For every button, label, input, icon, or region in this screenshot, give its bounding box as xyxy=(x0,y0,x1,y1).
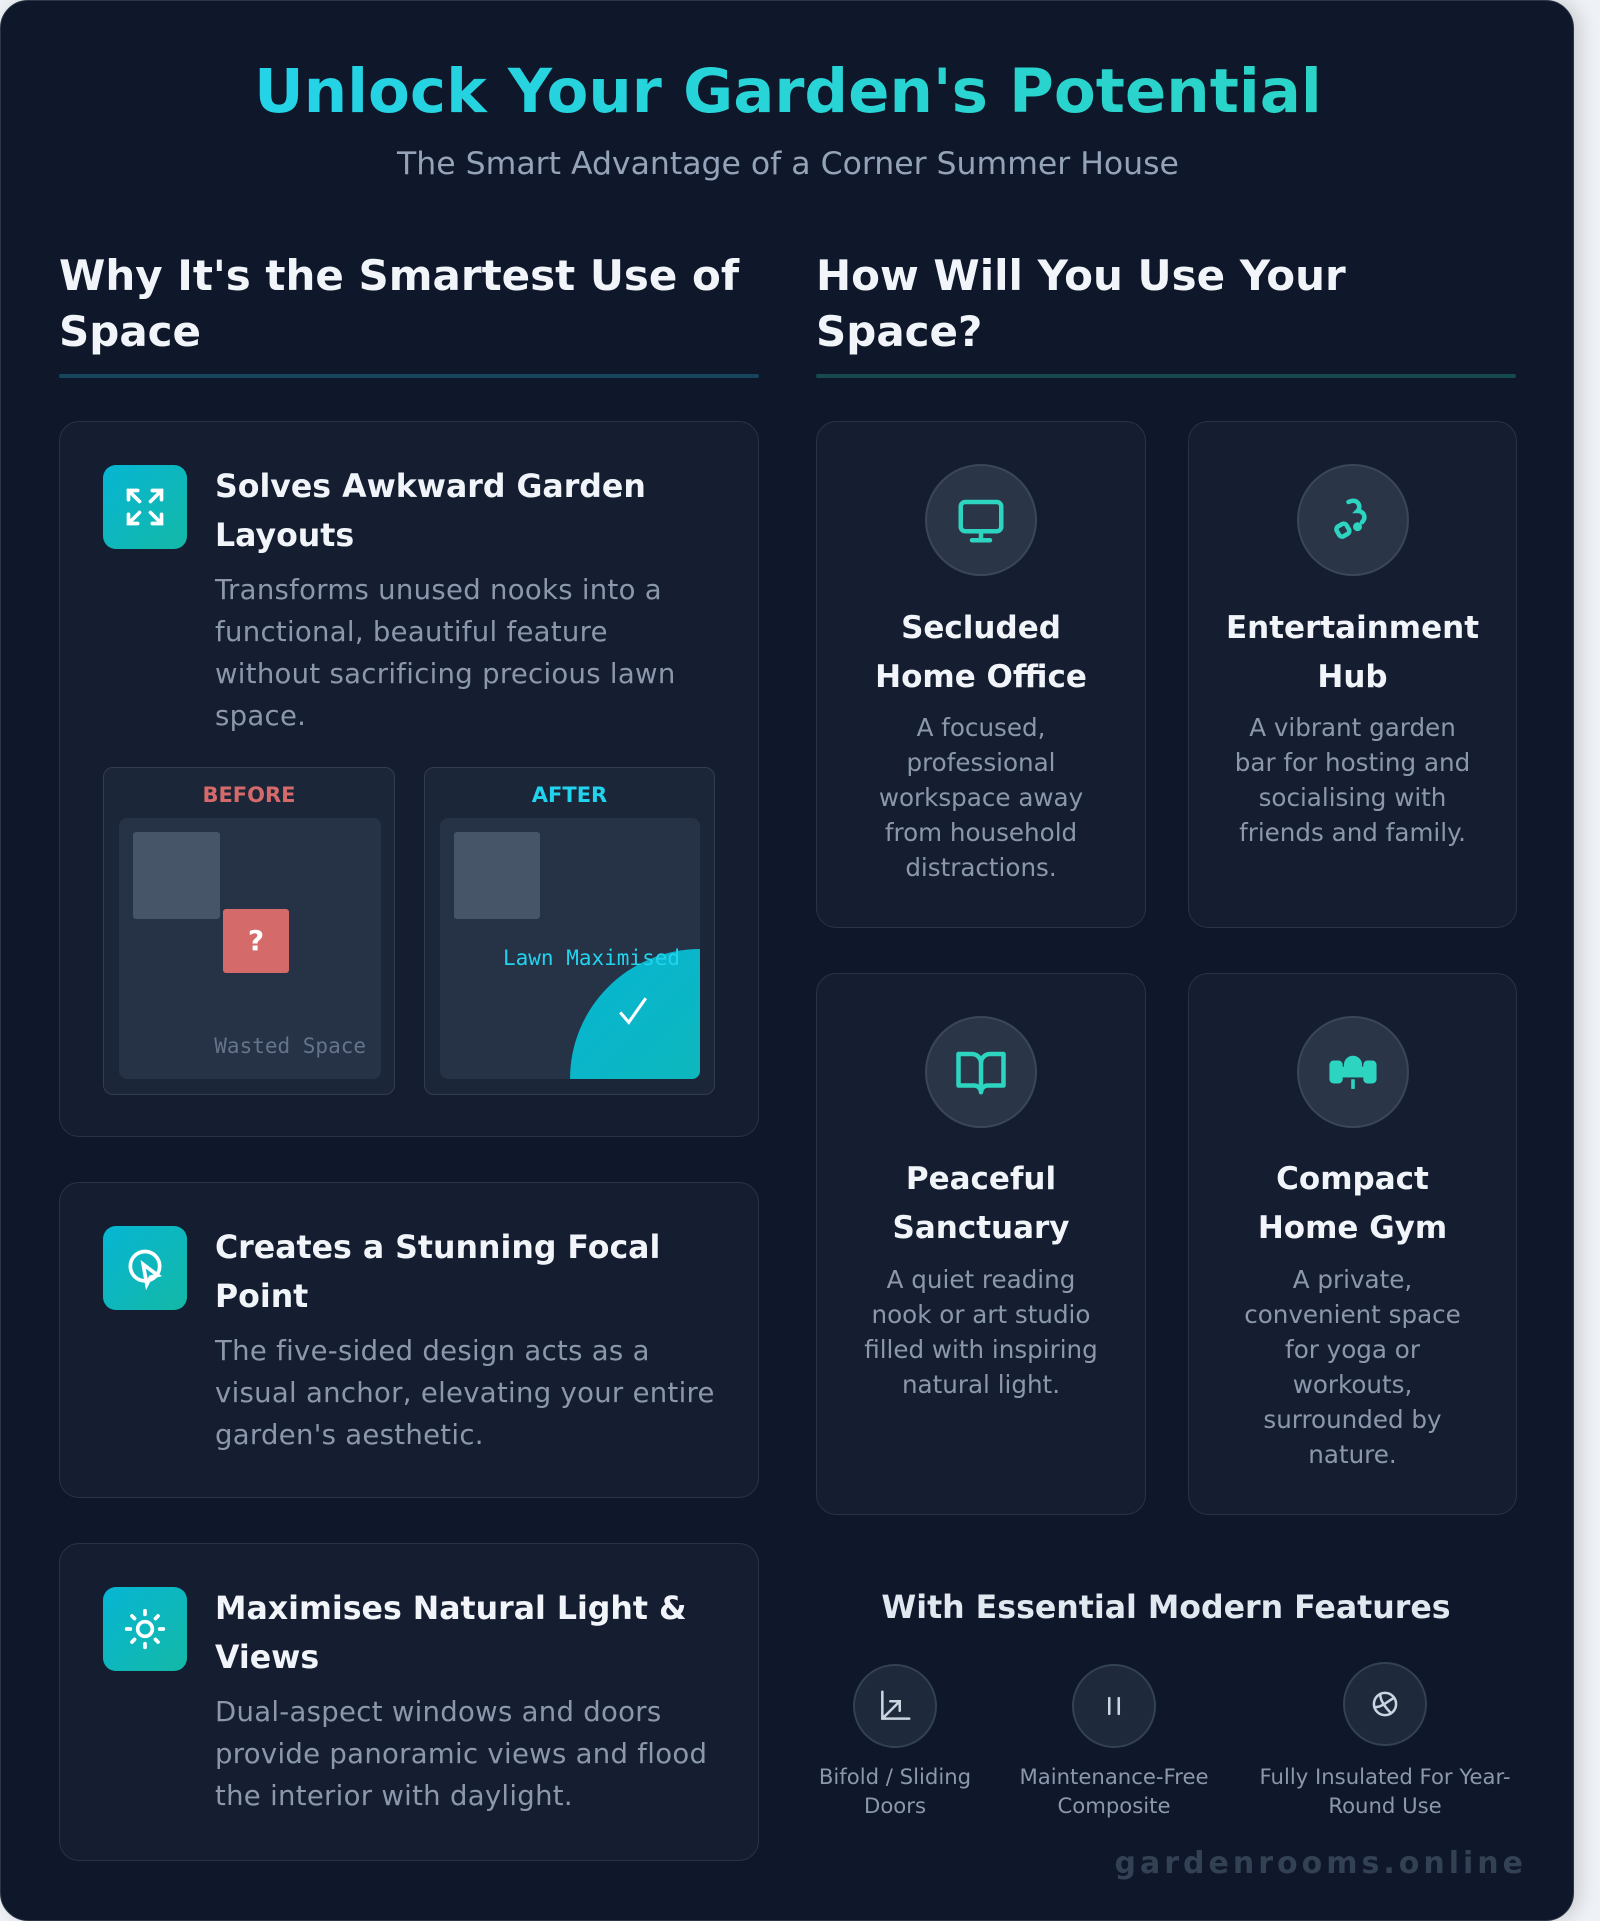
text: workouts, xyxy=(1293,1370,1412,1399)
panel: home office xyxy=(816,421,1146,928)
text: friends and family. xyxy=(1239,818,1466,847)
text: socialising with xyxy=(1259,783,1446,812)
subtitle: The Smart Advantage of a Corner Summer House xyxy=(397,146,1179,182)
title xyxy=(875,610,1087,695)
card title: Point xyxy=(215,1279,308,1315)
text xyxy=(864,1265,1098,1399)
icon: monitor xyxy=(925,464,1037,576)
card title xyxy=(215,469,646,554)
panel: home gym xyxy=(1188,973,1517,1515)
feature: insulated: Fully Insulated For Year- xyxy=(1259,1764,1511,1789)
icon: dumbbell xyxy=(1297,1016,1409,1128)
title: Compact xyxy=(1276,1161,1429,1197)
card text xyxy=(214,574,676,732)
text: nook or art studio xyxy=(872,1300,1090,1329)
diagram: before: BEFORE xyxy=(202,783,296,807)
title: Secluded xyxy=(901,610,1061,646)
text: bar for hosting and xyxy=(1235,748,1470,777)
heading: how will you use xyxy=(816,251,1346,356)
card title xyxy=(215,1591,687,1676)
heading: essential features: With Essential Modern Features xyxy=(881,1590,1451,1626)
text: A focused, xyxy=(917,713,1045,742)
title: Peaceful xyxy=(906,1161,1056,1197)
text xyxy=(1235,713,1470,847)
text: A vibrant garden xyxy=(1249,713,1456,742)
card text: The five-sided design acts as a xyxy=(215,1335,650,1367)
heading: why smartest: Why It's the Smartest Use of xyxy=(59,251,739,300)
diagram: after: AFTER xyxy=(532,783,607,807)
card text: the interior with daylight. xyxy=(215,1780,573,1812)
panel: solves awkward layouts xyxy=(59,421,759,1137)
title: Hub xyxy=(1317,659,1388,695)
card text: Dual-aspect windows and doors xyxy=(215,1696,662,1728)
feature: composite xyxy=(1019,1664,1209,1818)
heading: why smartest xyxy=(59,251,740,356)
card text: without sacrificing precious lawn xyxy=(215,658,676,690)
text: for yoga or xyxy=(1285,1335,1420,1364)
feature: bifold doors: Bifold / Sliding xyxy=(819,1764,971,1789)
feature: bifold doors: Doors xyxy=(864,1793,926,1818)
text: from household xyxy=(885,818,1077,847)
text: workspace away xyxy=(879,783,1083,812)
diagram: before: Wasted Space xyxy=(214,1034,366,1058)
icon: pointer xyxy=(103,1226,187,1310)
text xyxy=(879,713,1083,882)
title: Unlock Your Garden's Potential xyxy=(254,56,1322,127)
title: Home Gym xyxy=(1258,1210,1447,1246)
panel: peaceful sanctuary xyxy=(816,973,1146,1515)
card text: space. xyxy=(215,700,306,732)
title xyxy=(1258,1161,1447,1246)
text: filled with inspiring xyxy=(864,1335,1098,1364)
title: Entertainment xyxy=(1226,610,1479,646)
feature: bifold doors xyxy=(819,1664,971,1818)
text: professional xyxy=(906,748,1056,777)
card title: Solves Awkward Garden xyxy=(215,469,646,505)
heading: how will you use: Space? xyxy=(816,307,982,356)
feature: insulated xyxy=(1259,1662,1511,1818)
card title: Views xyxy=(215,1640,319,1676)
panel: entertainment hub xyxy=(1188,421,1517,928)
diagram: after: Lawn Maximised xyxy=(503,946,680,970)
feature: insulated: Round Use xyxy=(1328,1793,1442,1818)
diagram: after xyxy=(424,767,715,1095)
text: surrounded by xyxy=(1263,1405,1442,1434)
text: A quiet reading xyxy=(887,1265,1075,1294)
text xyxy=(1244,1265,1461,1469)
red question box: ? xyxy=(248,924,264,957)
title xyxy=(892,1161,1070,1246)
feature: composite: Composite xyxy=(1057,1793,1171,1818)
title: Sanctuary xyxy=(892,1210,1070,1246)
heading: how will you use: How Will You Use Your xyxy=(816,251,1346,300)
title xyxy=(1226,610,1479,695)
title: Home Office xyxy=(875,659,1087,695)
panel: focal point xyxy=(59,1182,759,1498)
text: nature. xyxy=(1308,1440,1397,1469)
icon: glass xyxy=(1297,464,1409,576)
card text: provide panoramic views and flood xyxy=(215,1738,707,1770)
card text xyxy=(214,1335,715,1451)
text: distractions. xyxy=(905,853,1057,882)
icon: book xyxy=(925,1016,1037,1128)
feature: composite: Maintenance-Free xyxy=(1019,1764,1209,1789)
heading: why smartest: Space xyxy=(59,307,201,356)
watermark: gardenrooms.online xyxy=(1115,1846,1527,1881)
card text: Transforms unused nooks into a xyxy=(215,574,662,606)
diagram: before xyxy=(103,767,395,1095)
icon: expand arrows xyxy=(103,465,187,549)
card title: Maximises Natural Light & xyxy=(215,1591,687,1627)
panel: natural light xyxy=(59,1543,759,1861)
title xyxy=(1,52,1575,132)
text: A private, xyxy=(1293,1265,1412,1294)
icon: sun xyxy=(103,1587,187,1671)
red question box xyxy=(223,909,289,973)
card text: garden's aesthetic. xyxy=(215,1419,484,1451)
text: natural light. xyxy=(902,1370,1060,1399)
card title: Creates a Stunning Focal xyxy=(215,1230,660,1266)
card text: functional, beautiful feature xyxy=(215,616,608,648)
card title xyxy=(215,1230,660,1315)
card title: Layouts xyxy=(215,518,354,554)
card text: visual anchor, elevating your entire xyxy=(215,1377,715,1409)
text: convenient space xyxy=(1244,1300,1461,1329)
card text xyxy=(215,1696,707,1812)
